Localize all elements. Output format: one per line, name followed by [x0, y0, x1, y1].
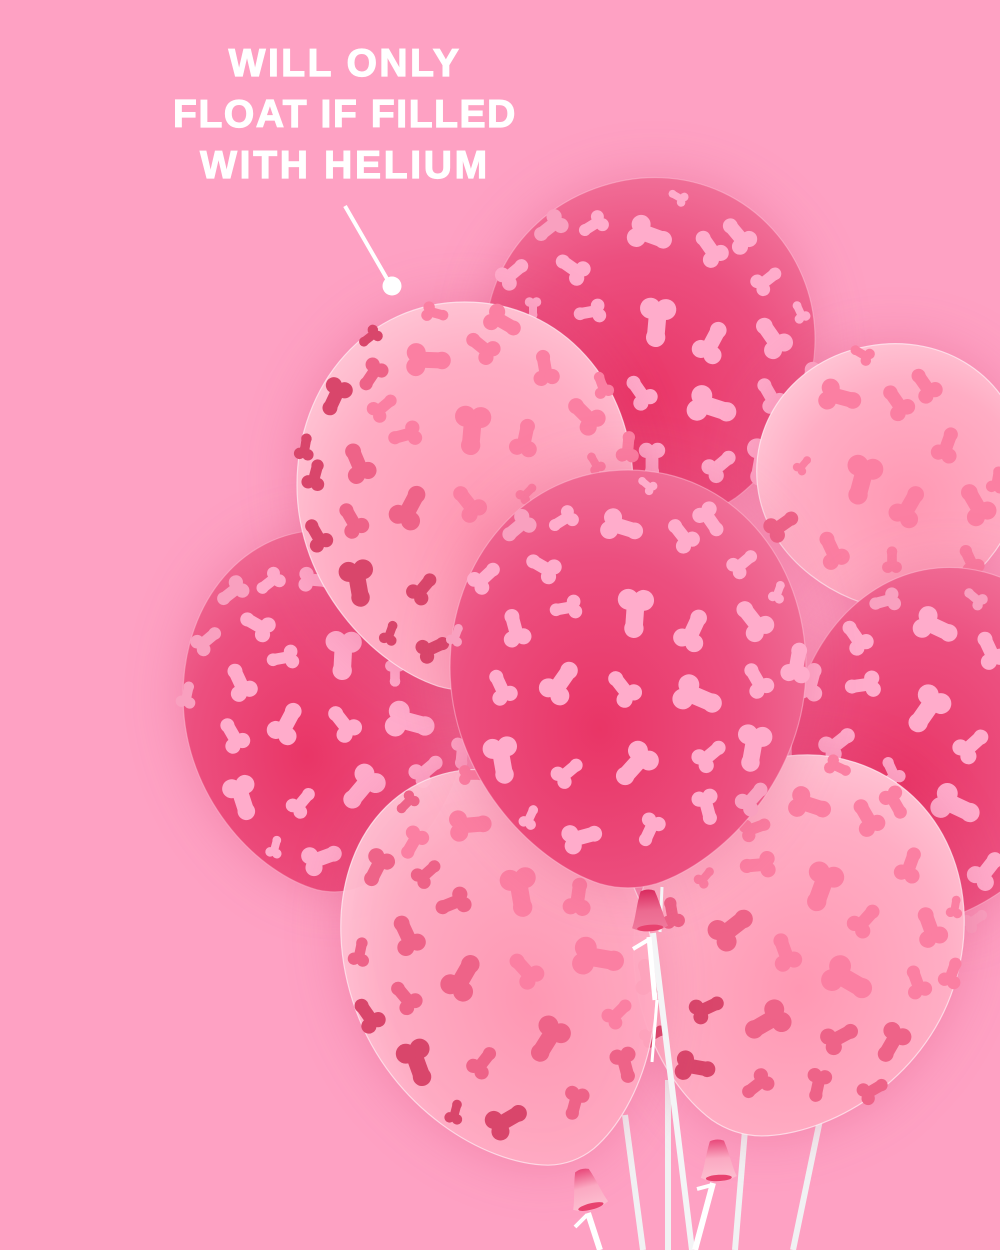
balloon: bottom right light: [580, 712, 1000, 1182]
balloon sticks behind the bunch: [625, 1080, 820, 1250]
balloon: bottom left light: [290, 725, 715, 1213]
balloon string and stick: bottom right: [695, 1183, 713, 1250]
balloon knot: bottom left: [564, 1165, 609, 1214]
balloon: centre dark: [445, 470, 815, 888]
balloon knot: bottom right: [699, 1139, 737, 1182]
balloon: left light: [293, 300, 641, 690]
balloon: top dark: [440, 132, 867, 566]
balloon string and stick: centre: [633, 887, 692, 1250]
balloon: right dark: [748, 534, 1000, 960]
caption: helium note: [173, 42, 517, 187]
balloon string and stick: bottom left: [575, 1213, 600, 1250]
balloon: left dark: [172, 520, 482, 902]
caption: helium note: WILL ONLY: [229, 42, 461, 85]
caption: helium note: FLOAT IF FILLED: [173, 93, 517, 136]
balloon: right light: [737, 323, 1000, 632]
balloon knot: centre: [629, 888, 668, 933]
leader line with dot: [345, 206, 402, 296]
caption: helium note: WITH HELIUM: [200, 144, 490, 187]
